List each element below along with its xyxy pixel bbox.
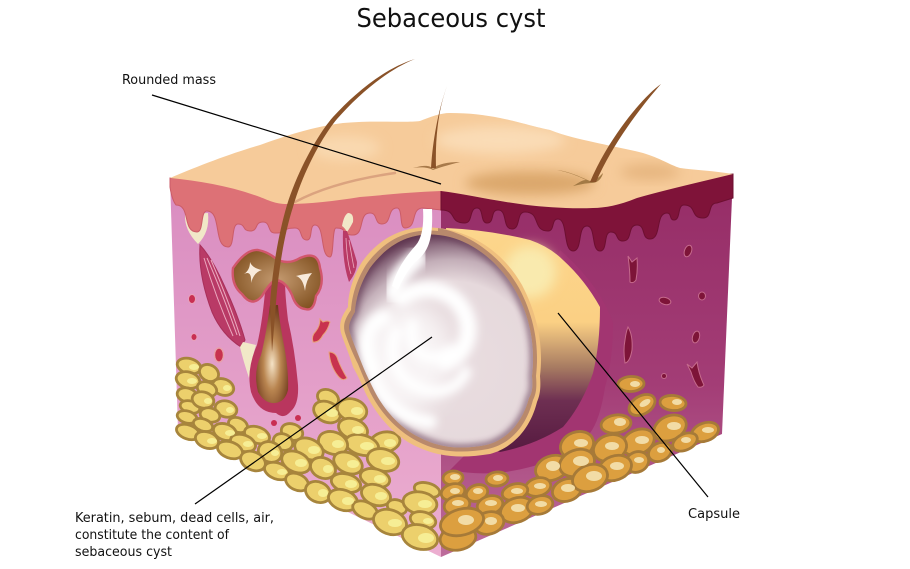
skin block illustration [165, 59, 740, 557]
hair: middle [431, 86, 447, 168]
inner rim [344, 228, 537, 452]
fat cell highlights: right face [450, 381, 714, 525]
pore fold: middle [413, 162, 460, 170]
muscle attachment: left [185, 213, 208, 244]
panel: right skin face [441, 174, 733, 557]
pore fold: right [557, 170, 603, 186]
fat cell highlights: left face [187, 364, 434, 543]
capsule highlight [504, 246, 556, 298]
arrector pili muscle: center [342, 213, 357, 282]
sebaceous gland [233, 250, 322, 309]
hair: large [270, 59, 415, 352]
hair follicle [249, 280, 298, 416]
sebum duct [392, 209, 432, 292]
arrector pili muscle: left [200, 245, 256, 378]
callout: contents [75, 337, 432, 560]
outer rim [340, 227, 541, 456]
panel: skin surface top [170, 113, 733, 208]
title: Sebaceous cyst [356, 4, 546, 34]
callout: contents: Keratin, sebum, dead cells, air, [75, 511, 274, 526]
inner shading and white swirls [349, 235, 533, 448]
callout: capsule: Capsule [688, 507, 740, 522]
fat cells: left face [174, 356, 441, 553]
epidermis: right [441, 174, 733, 251]
cyst cross-section [340, 209, 541, 456]
skin fold crease [295, 173, 395, 202]
vessels: left face [188, 294, 347, 426]
callout: contents: sebaceous cyst [75, 545, 172, 560]
cyst core [349, 235, 533, 448]
hair bulb [256, 305, 288, 403]
callout: rounded mass [122, 73, 441, 184]
panel: left skin face [170, 178, 441, 557]
fat cells: right face [437, 376, 721, 553]
callout: rounded mass: Rounded mass [122, 73, 216, 88]
callout: contents: constitute the content of [75, 528, 229, 543]
hair: right [590, 84, 661, 182]
cyst shadow [450, 250, 613, 473]
callout: capsule [558, 313, 740, 522]
vessels: right face [624, 244, 706, 387]
epidermis: left [170, 178, 441, 257]
capsule side [446, 228, 600, 452]
